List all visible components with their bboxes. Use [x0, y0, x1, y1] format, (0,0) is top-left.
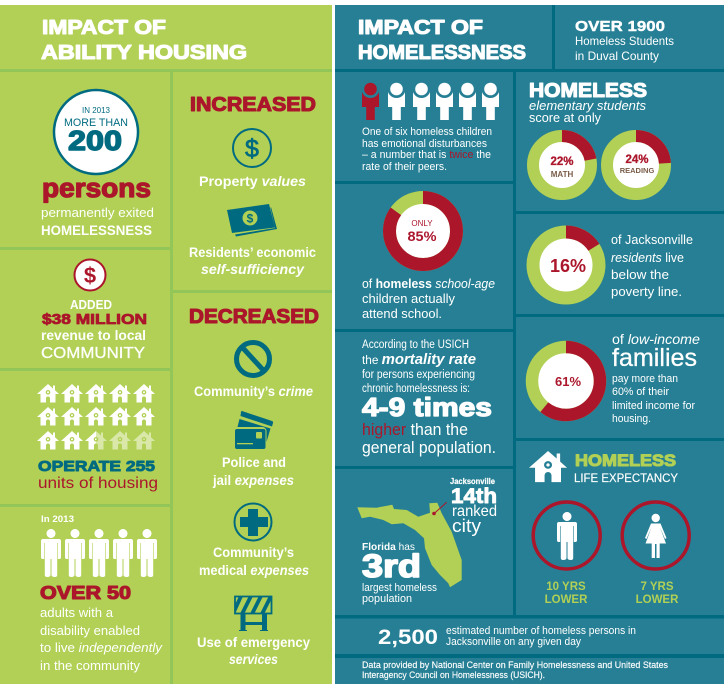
stat: one of six children [362, 80, 500, 173]
stat: 16 percent below poverty line: of Jacksonville [611, 232, 693, 247]
section: decreased: services [229, 652, 278, 667]
title: impact of ability housing: IMPACT OF [42, 17, 166, 39]
section: homeless life expectancy: HOMELESS [575, 451, 676, 470]
chart: 85 percent attend school: children actually [362, 291, 455, 306]
stat: over 1900 homeless students: Homeless Students [575, 34, 674, 48]
panel: impact of homelessness [335, 5, 724, 684]
chart: 85 percent attend school [362, 198, 495, 321]
stat: one of six children: – a number that is twice the [362, 149, 491, 161]
stat: over 50 adults with a disability [40, 514, 163, 673]
stat: 2,500 homeless persons: 2,500 [378, 626, 438, 649]
stat: added 38 million revenue: revenue to local [41, 328, 146, 343]
stat: 200 persons exited homelessness: persons [42, 173, 151, 203]
icon: banknotes [227, 204, 277, 236]
stat: mortality rate: According to the USICH [362, 339, 469, 351]
stat: operate 255 units of housing [37, 384, 158, 492]
map: florida [357, 503, 462, 587]
section: decreased [189, 306, 319, 667]
stat: florida map and rankings: city [452, 515, 482, 536]
stat: 200 persons exited homelessness: IN 2013 [82, 106, 111, 115]
chart: 24 percent reading: READING [620, 166, 654, 175]
stat: homeless elementary students: elementary students [529, 99, 646, 113]
stat: mortality rate: for persons experiencing [362, 369, 475, 381]
chart: 24 percent reading: 24% [625, 154, 649, 166]
stat: 61 percent of low-income families: of low-income [612, 331, 700, 347]
stat: added 38 million revenue: COMMUNITY [41, 345, 145, 362]
source note [362, 660, 668, 681]
section: homeless life expectancy: LOWER [636, 594, 679, 606]
section: decreased: Police and [222, 455, 286, 470]
section: increased: self-sufficiency [201, 261, 305, 277]
section: increased: Residents’ economic [189, 245, 316, 260]
source note: Interagency Council on Homelessness (USICH). [362, 670, 545, 681]
icon: road barricade [232, 594, 272, 631]
chart: 85 percent attend school: of homeless school-age [362, 276, 495, 291]
stat: 16 percent below poverty line: poverty line. [611, 284, 682, 299]
icon: rows of houses [37, 384, 155, 450]
icon: house [529, 451, 567, 482]
stat: over 50 adults with a disability: In 2013 [41, 514, 74, 524]
stat: added 38 million revenue [41, 260, 147, 362]
title: impact of homelessness: IMPACT OF [358, 17, 483, 39]
stat: florida map and rankings: Florida has [362, 541, 415, 553]
section: homeless life expectancy: 7 YRS [640, 581, 674, 593]
stat: 16 percent below poverty line: residents live [611, 250, 684, 265]
icon: no sign [236, 342, 270, 376]
title: impact of ability housing: ABILITY HOUSING [41, 42, 247, 64]
stat: 61 percent of low-income families: limited income for [612, 400, 695, 412]
stat: 61 percent of low-income families [532, 331, 700, 425]
stat: florida map and rankings: 14th [451, 485, 497, 508]
icon: man in circle [533, 502, 600, 569]
stat: mortality rate: the mortality rate [362, 352, 476, 368]
stat: 61 percent of low-income families: housing. [612, 413, 651, 425]
section: homeless life expectancy: 10 YRS [546, 581, 586, 593]
title: impact of homelessness: HOMELESSNESS [358, 42, 526, 64]
stat: florida map and rankings: population [362, 593, 412, 605]
section: decreased: medical expenses [199, 563, 309, 578]
icon: woman in circle [622, 502, 689, 569]
section: homeless life expectancy [529, 451, 689, 606]
stat: 61 percent of low-income families: pay more than [612, 373, 678, 385]
stat: operate 255 units of housing: OPERATE 255 [38, 458, 155, 475]
title: impact of ability housing [41, 17, 247, 64]
stat: homeless elementary students [529, 80, 665, 194]
stat: operate 255 units of housing: units of housing [38, 475, 158, 492]
chart: 85 percent attend school: attend school. [362, 306, 442, 321]
stat: 61 percent of low-income families: families [612, 344, 697, 372]
stat: 200 persons exited homelessness [41, 90, 154, 238]
stat: 61 percent of low-income families: 61% [555, 374, 581, 389]
stat: homeless elementary students: HOMELESS [529, 80, 647, 102]
icon: banknotes: $ [247, 212, 254, 226]
stat: florida map and rankings: 3rd [362, 548, 421, 584]
stat: 16 percent below poverty line [533, 232, 693, 299]
section: increased: INCREASED [190, 94, 316, 116]
stat: 2,500 homeless persons [378, 625, 636, 649]
stat: florida map and rankings: largest homeless [362, 582, 437, 594]
panel: impact of ability housing [0, 5, 332, 684]
stat: over 50 adults with a disability: OVER 50 [40, 583, 131, 603]
stat: florida map and rankings: ranked [452, 503, 497, 520]
chart: 22 percent math: MATH [551, 170, 573, 179]
section: decreased: DECREASED [189, 306, 319, 328]
stat: 2,500 homeless persons: estimated number of homeless persons in [446, 625, 636, 637]
icon: six children [362, 80, 500, 120]
icon: dollar circle: $ [245, 135, 259, 163]
title: impact of homelessness [358, 17, 526, 64]
stat: 61 percent of low-income families: 60% of their [612, 386, 669, 398]
stat: 200 persons exited homelessness: MORE THAN [64, 117, 128, 129]
chart: 22 percent math [533, 136, 591, 194]
section: decreased: Use of emergency [197, 635, 310, 650]
stat: mortality rate: higher than the [362, 421, 468, 439]
icon: medical cross [234, 504, 272, 540]
stat: one of six children: One of six homeless children [362, 126, 492, 138]
section: increased [189, 94, 316, 277]
stat: mortality rate: chronic homelessness is: [362, 383, 470, 395]
icon: five adults [41, 529, 157, 577]
icon: dollar circle [233, 129, 271, 167]
stat: added 38 million revenue: ADDED [70, 297, 112, 312]
section: homeless life expectancy: LIFE EXPECTANCY [574, 473, 678, 485]
stat: over 1900 homeless students: in Duval County [575, 49, 659, 63]
stat: florida map and rankings: Jacksonville [450, 477, 496, 486]
stat: over 50 adults with a disability: in the community [40, 659, 141, 673]
stat: homeless elementary students: score at only [529, 111, 602, 125]
stat: 200 persons exited homelessness: 200 [68, 125, 122, 156]
stat: mortality rate: 4-9 times [362, 392, 492, 422]
chart: 85 percent attend school: 85% [408, 228, 437, 244]
stat: over 1900 homeless students [575, 18, 674, 63]
section: decreased: Community’s crime [194, 384, 313, 399]
source note: Data provided by National Center on Family Homelessness and United States [362, 660, 668, 671]
stat: over 50 adults with a disability: disability enabled [40, 624, 140, 638]
stat: added 38 million revenue: $ [84, 263, 96, 288]
stat: over 50 adults with a disability: adults with a [40, 606, 113, 620]
icon: credit cards [235, 411, 273, 449]
stat: added 38 million revenue: $38 MILLION [42, 311, 147, 328]
stat: 200 persons exited homelessness: permanently exited [41, 205, 154, 220]
chart: 22 percent math: 22% [550, 156, 574, 168]
chart: 24 percent reading [607, 136, 665, 194]
stat: mortality rate: general population. [362, 439, 496, 457]
stat: over 1900 homeless students: OVER 1900 [575, 18, 665, 35]
section: decreased: jail expenses [212, 473, 294, 488]
stat: 2,500 homeless persons: Jacksonville on any given day [446, 636, 581, 648]
pointer: jacksonville [432, 502, 447, 515]
stat: 16 percent below poverty line: below the [611, 267, 669, 282]
stat: florida map and rankings [357, 477, 497, 605]
stat: 200 persons exited homelessness: HOMELESSNESS [41, 223, 152, 238]
stat: one of six children: rate of their peers. [362, 161, 447, 173]
section: increased: Property values [199, 173, 306, 189]
stat: over 50 adults with a disability: to live independently [40, 641, 163, 655]
stat: 16 percent below poverty line: 16% [550, 256, 586, 276]
stat: mortality rate [362, 339, 496, 457]
chart: 85 percent attend school: ONLY [411, 219, 433, 228]
section: decreased: Community’s [213, 545, 294, 560]
stat: one of six children: has emotional disturbances [362, 138, 487, 150]
section: homeless life expectancy: LOWER [545, 594, 588, 606]
